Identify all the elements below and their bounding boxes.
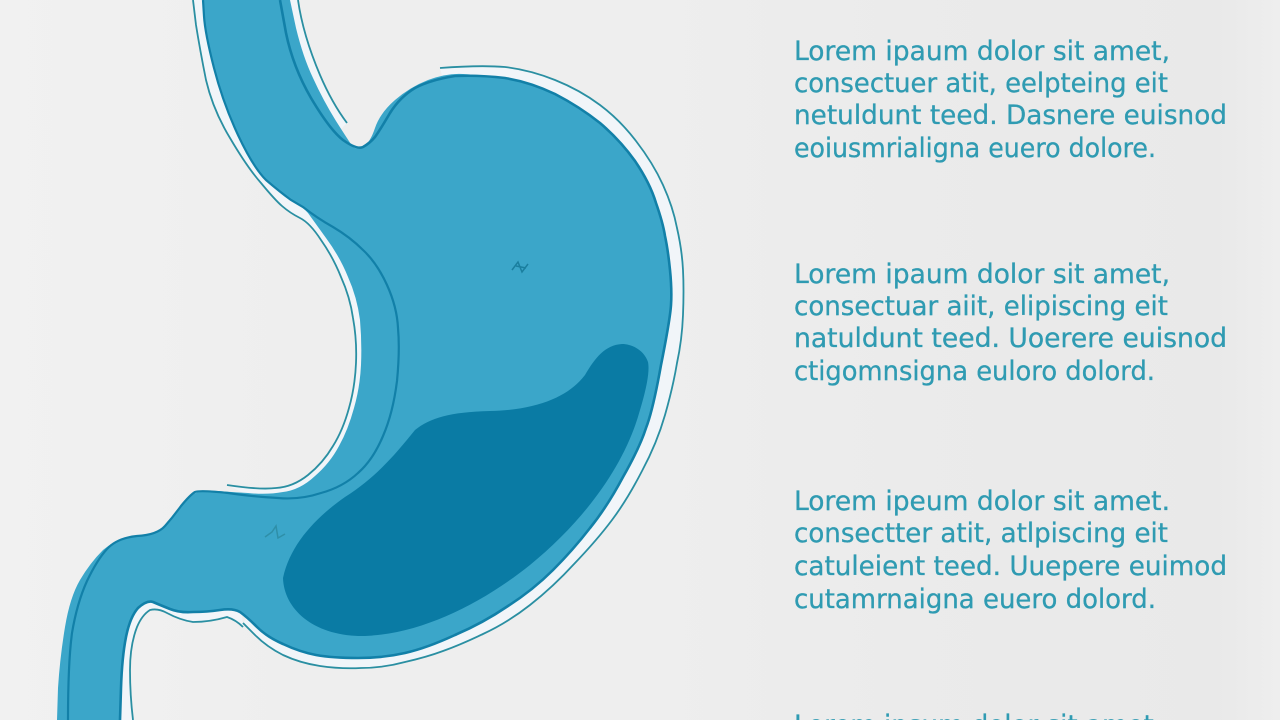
text block 2: consectuar aiit, elipiscing eit: [794, 291, 1168, 322]
text block 3: consectter atit, atlpiscing eit: [794, 518, 1168, 549]
white membrane bands: [100, 0, 684, 720]
thin outer membrane lines: [130, 0, 684, 720]
text block 2: [794, 259, 1227, 387]
text block 2: natuldunt teed. Uoerere euisnod: [794, 323, 1227, 354]
text block 3: Lorem ipeum dolor sit amet.: [794, 486, 1170, 517]
text block 3: [794, 486, 1227, 615]
text block 1: consectuer atit, eelpteing eit: [794, 68, 1168, 99]
small mark lower: [265, 526, 285, 538]
dark fluid pool: [283, 344, 649, 636]
text block 2: ctigomnsigna euloro dolord.: [794, 356, 1155, 387]
text block 3: catuleient teed. Uuepere euimod: [794, 551, 1227, 582]
text block 3: cutamrnaigna euero dolord.: [794, 584, 1156, 615]
text block 1: [794, 36, 1227, 164]
text block 1: Lorem ipaum dolor sit amet,: [794, 36, 1170, 67]
dark contour: left wall and inner curve: [68, 0, 399, 720]
text block 1: netuldunt teed. Dasnere euisnod: [794, 100, 1227, 131]
text block 2: Lorem ipaum dolor sit amet,: [794, 259, 1170, 290]
stomach body fill: [57, 0, 671, 720]
text block 1: eoiusmrialigna euero dolore.: [794, 133, 1156, 164]
small mark upper: [512, 262, 528, 272]
dark contour: outer wall: [120, 0, 671, 720]
stomach diagram: [57, 0, 684, 720]
